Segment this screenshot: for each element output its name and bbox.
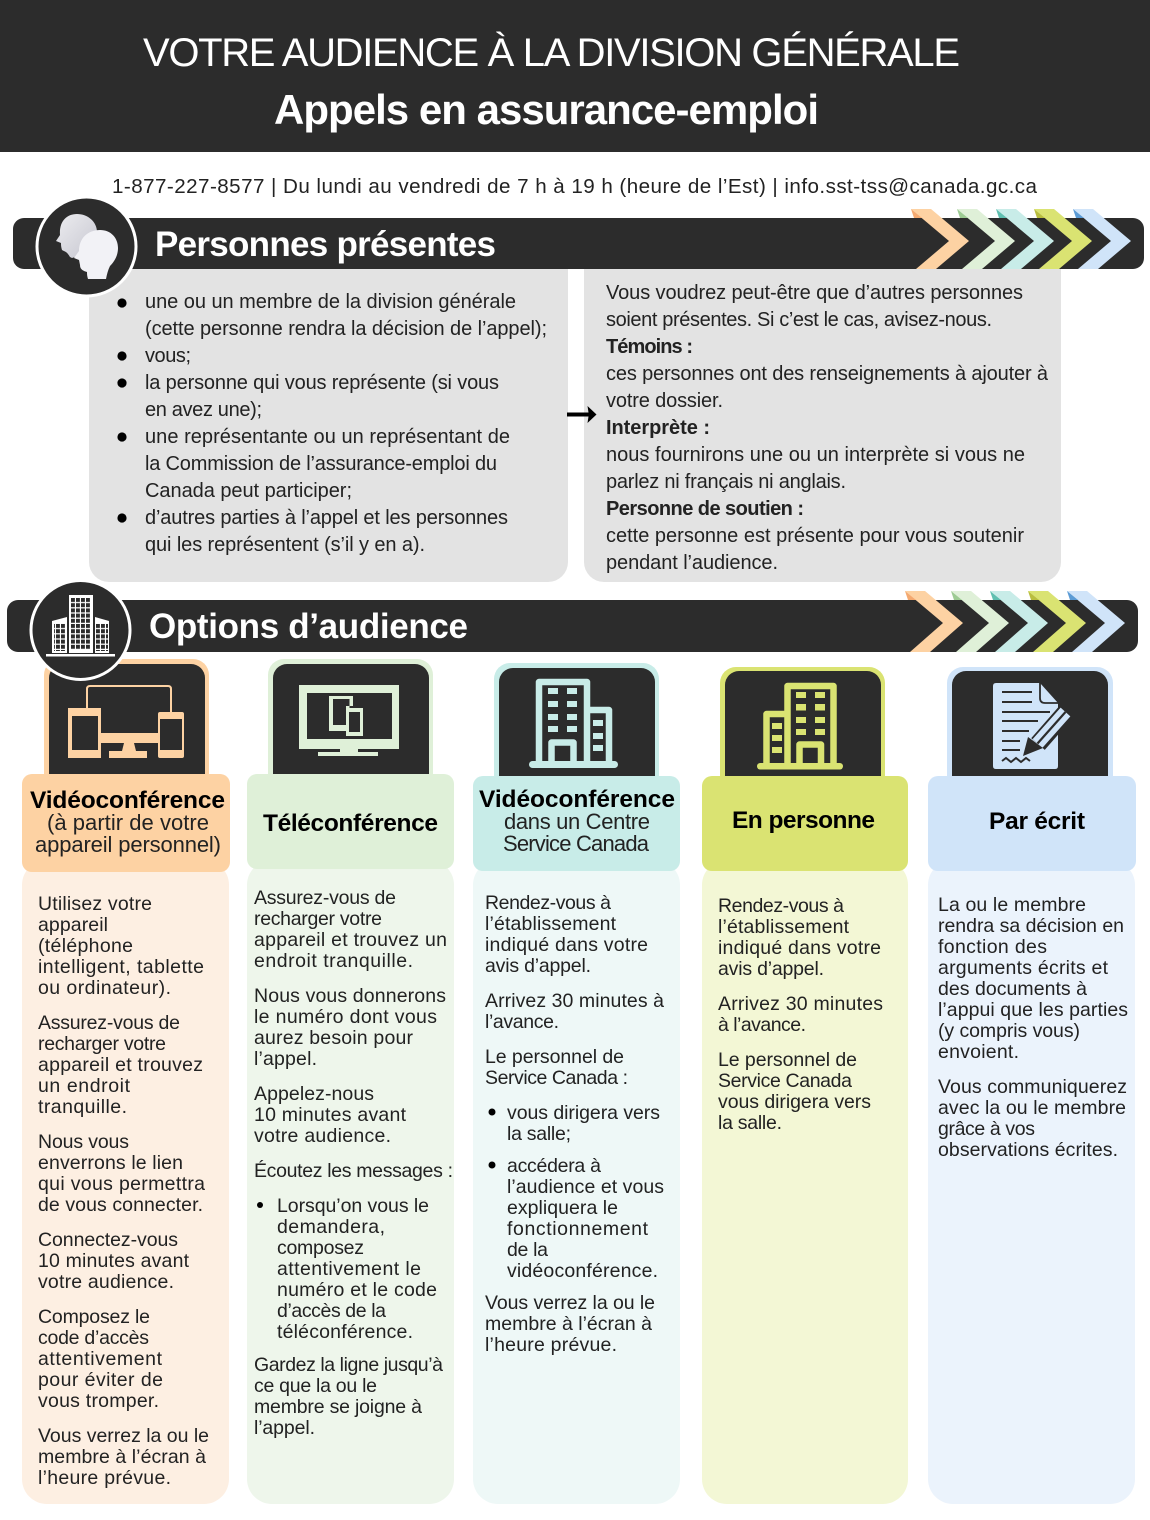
card heading: Vidéoconférence [30, 787, 225, 814]
card text: Vous verrez la ou le [485, 1292, 655, 1314]
card text: composez [277, 1237, 364, 1259]
card text: Rendez-vous à [718, 895, 844, 917]
panel: who attends, left list: d’autres parties à l’appel et les personnes [145, 507, 508, 529]
icon: monitor with devices [268, 659, 433, 780]
panel: Vidéoconférence Service Canada [473, 663, 680, 1504]
card text: ce que la ou le [254, 1375, 377, 1397]
card text: fonction des [938, 936, 1047, 958]
card text: avec la ou le membre [938, 1097, 1126, 1119]
section bar: Options d'audience [7, 591, 1138, 652]
panel: who attends, right text: Témoins : [606, 336, 693, 358]
header banner [0, 0, 1150, 152]
card text: l’établissement [485, 913, 617, 935]
panel: Téléconférence [247, 659, 454, 1504]
chevrons [905, 591, 1125, 652]
card text: vous dirigera vers [507, 1102, 660, 1124]
card text: recharger votre [254, 908, 382, 930]
card text: un endroit [38, 1075, 131, 1097]
panel: who attends, right text: votre dossier. [606, 390, 723, 412]
panel: Vidéoconférence personal device [22, 659, 230, 1504]
card text [38, 893, 209, 1489]
card text: Composez le [38, 1306, 150, 1328]
title: VOTRE AUDIENCE À LA DIVISION GÉNÉRALE [143, 30, 960, 75]
card text: avis d’appel. [485, 955, 591, 977]
panel: who attends, left list: une représentante ou un représentant de [145, 426, 510, 448]
card text: Arrivez 30 minutes [718, 993, 883, 1015]
panel: who attends, left list: (cette personne rendra la décision de l’appel); [145, 318, 547, 340]
card text [718, 895, 883, 1134]
panel: who attends, right text: Vous voudrez peut-être que d’autres personnes [606, 282, 1023, 304]
card text: expliquera le [507, 1197, 618, 1219]
card text: indiqué dans votre [718, 937, 881, 959]
chevrons [911, 209, 1131, 269]
subtitle: Appels en assurance-emploi [274, 86, 819, 133]
panel: who attends, left list: une ou un membre de la division générale [145, 291, 516, 313]
panel: who attends, right text: soient présentes. Si c’est le cas, avisez-nous. [606, 309, 992, 331]
card text: code d’accès [38, 1327, 149, 1349]
card text [938, 894, 1128, 1161]
card text: Le personnel de [718, 1049, 857, 1071]
card text: vous dirigera vers [718, 1091, 871, 1113]
card text: pour éviter de [38, 1369, 163, 1391]
card heading: (à partir de votre [47, 810, 209, 835]
panel: who attends, right text: Interprète : [606, 417, 710, 439]
card heading: Téléconférence [263, 810, 438, 837]
panel: who attends, right text [584, 262, 1061, 582]
card text: Nous vous donnerons [254, 985, 446, 1007]
card text: numéro et le code [277, 1279, 437, 1301]
icon: people [37, 197, 136, 296]
card text: Gardez la ligne jusqu’à [254, 1354, 443, 1376]
panel: who attends, left list: en avez une); [145, 399, 262, 421]
card text: envoient. [938, 1041, 1019, 1063]
card text: l’heure prévue. [38, 1467, 171, 1489]
card text: des documents à [938, 978, 1087, 1000]
card heading: En personne [732, 807, 875, 834]
card text: Rendez-vous à [485, 892, 611, 914]
icon: buildings [31, 580, 130, 680]
card text: fonctionnement [507, 1218, 649, 1240]
card heading: Vidéoconférence [479, 786, 675, 813]
panel: who attends, right text: parlez ni français ni anglais. [606, 471, 846, 493]
panel: who attends, right text: cette personne est présente pour vous soutenir [606, 525, 1024, 547]
card text: votre audience. [254, 1125, 391, 1147]
card text: Service Canada : [485, 1067, 628, 1089]
card text: la salle. [718, 1112, 782, 1134]
card heading: dans un Centre [504, 809, 650, 834]
card text: Service Canada [718, 1070, 852, 1092]
panel: who attends, right text: nous fournirons une ou un interprète si vous ne [606, 444, 1025, 466]
card text: Appelez-nous [254, 1083, 374, 1105]
card text: Utilisez votre [38, 893, 152, 915]
card text: la salle; [507, 1123, 571, 1145]
card text: demandera, [277, 1216, 385, 1238]
card text: attentivement le [277, 1258, 421, 1280]
card text: Vous verrez la ou le [38, 1425, 209, 1447]
card text: l’établissement [718, 916, 850, 938]
panel: who attends, right text: pendant l’audience. [606, 552, 778, 574]
card text: Arrivez 30 minutes à [485, 990, 664, 1012]
card text: l’avance. [485, 1011, 559, 1033]
card text: Vous communiquerez [938, 1076, 1127, 1098]
card text: de vous connecter. [38, 1194, 203, 1216]
card text [254, 887, 453, 1439]
card text: Nous vous [38, 1131, 129, 1153]
arrow between panels [567, 406, 596, 423]
card heading [30, 787, 225, 857]
card text: de la [507, 1239, 548, 1261]
icon: office building [720, 667, 885, 780]
card text: l’appel. [254, 1048, 317, 1070]
card text: endroit tranquille. [254, 950, 413, 972]
card text: grâce à vos [938, 1118, 1035, 1140]
icon: document and pencil [947, 667, 1113, 780]
card text: vous tromper. [38, 1390, 159, 1412]
card text: d’accès de la [277, 1300, 386, 1322]
card text: l’appel. [254, 1417, 315, 1439]
panel: who attends, left list: Canada peut participer; [145, 480, 352, 502]
card text: Le personnel de [485, 1046, 624, 1068]
card text: (téléphone [38, 935, 133, 957]
section bar: Personnes présentes [13, 209, 1144, 269]
card text: appareil et trouvez un [254, 929, 447, 951]
card text: La ou le membre [938, 894, 1086, 916]
card text: Connectez-vous [38, 1229, 178, 1251]
panel: Par écrit [928, 667, 1136, 1504]
card text: qui vous permettra [38, 1173, 205, 1195]
card text: 10 minutes avant [38, 1250, 190, 1272]
icon: devices [44, 659, 209, 780]
card text: appareil [38, 914, 108, 936]
card text: vidéoconférence. [507, 1260, 658, 1282]
card heading: appareil personnel) [35, 832, 221, 857]
card text: aurez besoin pour [254, 1027, 414, 1049]
card text: téléconférence. [277, 1321, 413, 1343]
heading: Personnes présentes [155, 225, 496, 264]
card text: le numéro dont vous [254, 1006, 437, 1028]
card text: Écoutez les messages : [254, 1159, 453, 1182]
card text: l’appui que les parties [938, 999, 1128, 1021]
card text: Lorsqu’on vous le [277, 1195, 429, 1217]
panel: who attends, left list: la personne qui vous représente (si vous [145, 372, 499, 394]
card text: recharger votre [38, 1033, 166, 1055]
card text: l’heure prévue. [485, 1334, 617, 1356]
panel: who attends, left list [89, 262, 568, 582]
card text: avis d’appel. [718, 958, 824, 980]
card text: membre se joigne à [254, 1396, 422, 1418]
card text: membre à l’écran à [485, 1313, 652, 1335]
card text [485, 892, 664, 1356]
heading: Options d’audience [149, 607, 468, 646]
card text: 10 minutes avant [254, 1104, 407, 1126]
card text: observations écrites. [938, 1139, 1118, 1161]
card text: tranquille. [38, 1096, 127, 1118]
card text: (y compris vous) [938, 1020, 1080, 1042]
card text: membre à l’écran à [38, 1446, 206, 1468]
card text: indiqué dans votre [485, 934, 648, 956]
icon: building [494, 663, 659, 780]
card text: Assurez-vous de [254, 887, 396, 909]
contact line: 1-877-227-8577 | Du lundi au vendredi de 7 h à 19 h (heure de l’Est) | info.sst-tss@canada.gc.ca [112, 175, 1038, 198]
panel: who attends, left list: vous; [145, 345, 191, 367]
card text: votre audience. [38, 1271, 174, 1293]
card text: enverrons le lien [38, 1152, 183, 1174]
card text: arguments écrits et [938, 957, 1109, 979]
card heading: Par écrit [989, 808, 1085, 835]
panel: En personne [702, 667, 908, 1504]
card text: Assurez-vous de [38, 1012, 180, 1034]
card text: attentivement [38, 1348, 163, 1370]
card text: ou ordinateur). [38, 977, 171, 999]
panel: who attends, right text: ces personnes ont des renseignements à ajouter à [606, 363, 1049, 385]
panel: who attends, left list: la Commission de l’assurance-emploi du [145, 453, 497, 475]
card text: accédera à [507, 1155, 601, 1177]
card text: l’audience et vous [507, 1176, 664, 1198]
panel: who attends, right text: Personne de soutien : [606, 498, 804, 520]
card heading: Service Canada [503, 831, 650, 856]
card text: appareil et trouvez [38, 1054, 203, 1076]
card text: rendra sa décision en [938, 915, 1124, 937]
card heading [479, 786, 675, 856]
card text: intelligent, tablette [38, 956, 204, 978]
panel: who attends, left list: qui les représentent (s’il y en a). [145, 534, 425, 556]
card text: à l’avance. [718, 1014, 806, 1036]
